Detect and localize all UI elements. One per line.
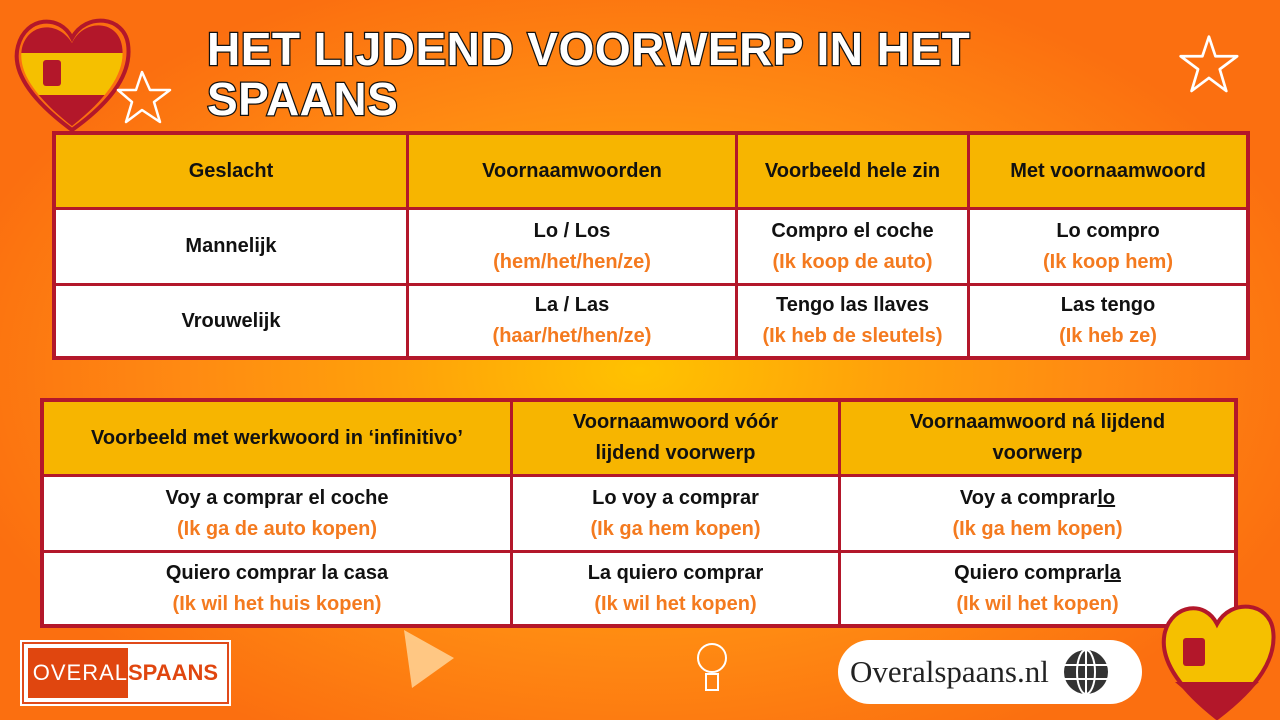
table 1: Voornaamwoorden [482, 160, 662, 182]
table 1: Tengo las llaves [776, 294, 929, 316]
table 2: (Ik wil het kopen) [956, 592, 1119, 614]
website badge [838, 640, 1142, 704]
table 2: lijdend voorwerp [595, 442, 756, 464]
table 1: (Ik koop hem) [1043, 250, 1173, 272]
table 2: Voornaamwoord vóór [573, 411, 778, 433]
icon: globe [1064, 650, 1108, 694]
table 2: Quiero comprar la casa [166, 562, 388, 584]
icon: star top-right [1179, 35, 1238, 92]
table 2: Lo voy a comprar [592, 486, 759, 508]
table 1: Met voornaamwoord [1010, 160, 1206, 182]
logo: Overal Spaans [22, 642, 229, 704]
title: SPAANS [207, 73, 398, 125]
table 1 [52, 131, 1250, 360]
table 2: Voy a comprarlo [960, 486, 1115, 508]
table 1: Lo compro [1056, 220, 1160, 242]
table 2: (Ik wil het kopen) [594, 592, 757, 614]
table 1: Lo / Los [534, 220, 610, 242]
table 1: (Ik koop de auto) [772, 250, 932, 272]
table 1: (Ik heb de sleutels) [762, 325, 943, 347]
table 2: (Ik ga de auto kopen) [177, 518, 377, 540]
table 1: (hem/het/hen/ze) [493, 250, 651, 272]
table 1: Compro el coche [771, 220, 934, 242]
icon: star [116, 70, 172, 124]
website badge: Overalspaans.nl [850, 654, 1049, 689]
table 1: La / Las [535, 294, 609, 316]
table 1: Las tengo [1061, 294, 1155, 316]
table 2: La quiero comprar [588, 562, 763, 584]
icon: light bulb [697, 643, 727, 691]
logo: Overal Spaans: SPAANS [128, 660, 218, 685]
icon: heart flag bottom-right [1162, 604, 1276, 720]
title [206, 23, 970, 125]
table 2: Quiero comprarla [954, 562, 1121, 584]
logo: Overal Spaans: OVERAL [33, 660, 128, 685]
table 2: (Ik wil het huis kopen) [173, 592, 381, 614]
table 2: Voorbeeld met werkwoord in ‘infinitivo’ [91, 426, 463, 448]
table 2: (Ik ga hem kopen) [590, 518, 761, 540]
table 1: (Ik heb ze) [1059, 325, 1157, 347]
table 2 [40, 398, 1238, 628]
table 2: Voornaamwoord ná lijdend [910, 411, 1165, 433]
table 1: Geslacht [189, 160, 273, 182]
table 2: (Ik ga hem kopen) [952, 518, 1123, 540]
table 2: Voy a comprar el coche [165, 486, 389, 508]
table 1: Vrouwelijk [182, 310, 280, 332]
table 2: voorwerp [992, 442, 1083, 464]
table 1: Voorbeeld hele zin [765, 160, 940, 182]
icon: heart flag top-left [14, 18, 130, 131]
icon: paper plane [404, 630, 454, 688]
table 1: (haar/het/hen/ze) [493, 325, 651, 347]
title: HET LIJDEND VOORWERP IN HET [207, 23, 970, 75]
table 1: Mannelijk [185, 235, 277, 257]
